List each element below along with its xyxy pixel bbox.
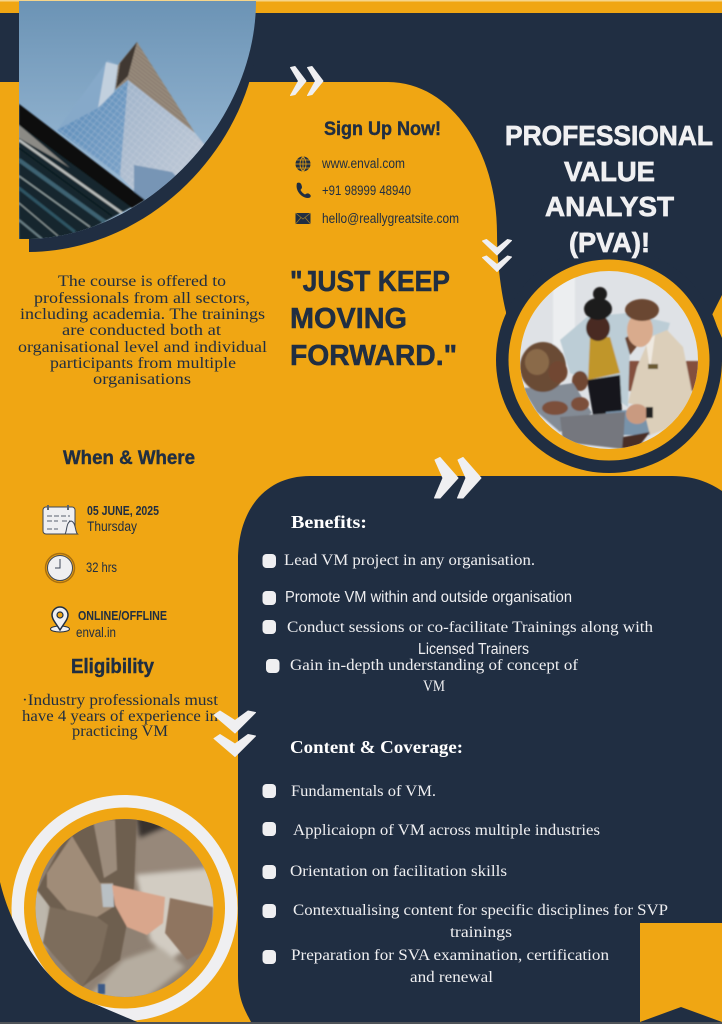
- photo ring: team: [508, 260, 710, 460]
- panel: benefits and content: [238, 476, 722, 1024]
- title: (PVA)!: [569, 227, 650, 258]
- bullet and text: orientation: Orientation on facilitation skills: [290, 863, 507, 880]
- bullet and text: conduct: Conduct sessions or co-facilitate Trainings along with: [287, 619, 653, 636]
- bullet and text: conduct: Licensed Trainers: [418, 641, 529, 658]
- icon: calendar with bell: [43, 505, 78, 534]
- photo: handshake: [36, 819, 214, 997]
- text block: course description: organisations: [93, 371, 191, 388]
- ribbon: [640, 923, 722, 1022]
- heading: when and where: When & Where: [63, 447, 195, 469]
- quote: [290, 266, 457, 372]
- photo ring: handshake: [24, 808, 225, 1008]
- panel: navy header and right column: [0, 13, 722, 362]
- text: email: hello@reallygreatsite.com: [322, 211, 459, 226]
- bullet and text: promote: Promote VM within and outside organisation: [285, 589, 572, 606]
- icon: globe: [296, 156, 310, 172]
- quote: "JUST KEEP: [290, 266, 450, 298]
- icon: chevrons down (top right): [482, 240, 512, 272]
- bullet and text: preparation: and renewal: [410, 969, 494, 986]
- bullet and text: gain: Gain in-depth understanding of concept of: [290, 657, 579, 674]
- bullet and text: preparation: [262, 947, 609, 986]
- text block: course description: The course is offered to: [58, 273, 226, 290]
- bullet and text: conduct: [262, 619, 653, 658]
- quote: FORWARD.": [290, 340, 457, 372]
- text: phone: +91 98999 48940: [322, 183, 411, 198]
- bullet and text: application: Applicaiopn of VM across multiple industries: [293, 822, 600, 839]
- text block: course description: are conducted both at: [62, 322, 222, 339]
- icon: chevrons down (left): [214, 711, 256, 756]
- text: location: [76, 609, 167, 640]
- icon: chevrons right (top): [290, 66, 323, 96]
- text block: eligibility: [22, 692, 219, 740]
- bullet and text: gain: [266, 657, 579, 695]
- icon: location pin: [50, 607, 70, 632]
- white ring: handshake: [12, 795, 238, 1021]
- icon: chevrons right (benefits): [434, 458, 481, 498]
- text block: eligibility: have 4 years of experience in: [22, 708, 218, 725]
- navy crescent behind tower photo: [29, 14, 258, 252]
- icon: stopwatch clock: [46, 554, 74, 582]
- bullet and text: contextualising: trainings: [450, 924, 512, 941]
- icon: envelope: [296, 213, 310, 224]
- bullet and text: lead: Lead VM project in any organisation.: [284, 552, 535, 569]
- title: PROFESSIONAL: [505, 120, 713, 151]
- text block: course description: organisational level and individual: [18, 339, 268, 356]
- text: duration: 32 hrs: [86, 560, 117, 575]
- text block: eligibility: ·Industry professionals must: [22, 692, 219, 709]
- text block: course description: [18, 273, 268, 388]
- bullet and text: gain: VM: [423, 678, 445, 695]
- title: VALUE: [564, 156, 655, 187]
- quote: MOVING: [290, 303, 407, 335]
- photo: glass tower: [19, 0, 259, 240]
- bullet and text: fundamentals: Fundamentals of VM.: [291, 783, 436, 800]
- heading: eligibility: Eligibility: [71, 656, 155, 678]
- text: date: Thursday: [87, 519, 137, 534]
- icon: phone: [297, 183, 311, 198]
- contact list: [296, 156, 459, 226]
- photo: team around laptop: [520, 271, 698, 449]
- heading: sign up: Sign Up Now!: [324, 118, 441, 140]
- heading: benefits: Benefits:: [291, 512, 367, 532]
- bullet and text: contextualising: [262, 902, 668, 941]
- panel: navy bottom-left corner: [0, 882, 142, 1024]
- text: location: ONLINE/OFFLINE: [78, 609, 167, 623]
- text block: course description: participants from multiple: [50, 355, 236, 372]
- text block: course description: including academia. The trainings: [20, 306, 265, 323]
- panel: navy circle behind team photo: [496, 247, 722, 473]
- text: location: enval.in: [76, 625, 116, 640]
- bullet and text: preparation: Preparation for SVA examination, certification: [291, 947, 609, 964]
- title: [505, 120, 713, 258]
- bullet and text: contextualising: Contextualising content for specific disciplines for SVP: [293, 902, 668, 919]
- text: website: www.enval.com: [321, 156, 405, 171]
- list: content and coverage: [262, 783, 668, 986]
- text: date: 05 JUNE, 2025: [87, 504, 159, 518]
- text: date: [87, 504, 159, 534]
- text block: course description: professionals from all sectors,: [34, 290, 250, 307]
- title: ANALYST: [545, 191, 674, 222]
- list: benefits: [262, 552, 653, 695]
- text block: eligibility: practicing VM: [72, 723, 168, 740]
- heading: content and coverage: Content & Coverage:: [290, 737, 463, 757]
